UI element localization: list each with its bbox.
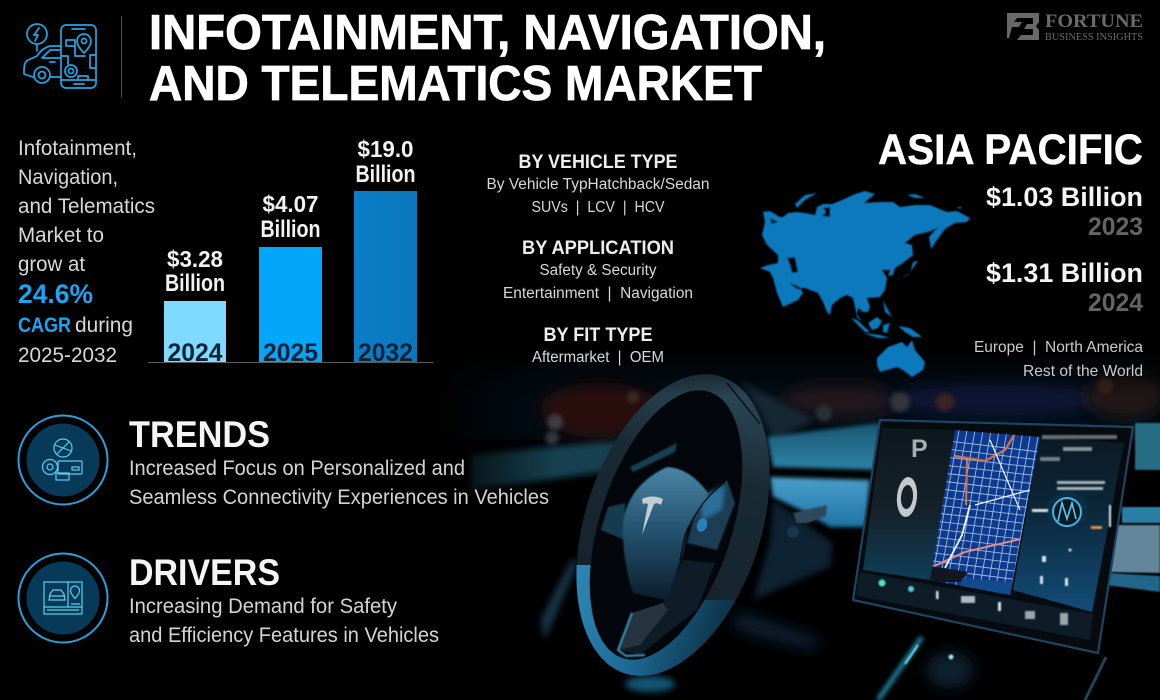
by application: Entertainment | Navigation [503, 285, 693, 302]
wheel: rim [576, 374, 770, 674]
CAGR statement: Navigation, [18, 166, 118, 189]
by vehicle type [486, 152, 710, 216]
bar 2025: 2025 [263, 339, 318, 367]
divider [120, 16, 122, 97]
segmentation list [486, 152, 710, 366]
dashboard bands [470, 380, 1160, 592]
brand tagline: BUSINESS INSIGHTS [1045, 32, 1143, 43]
drivers text: and Efficiency Features in Vehicles [129, 624, 439, 647]
bar 2024: $3.28 [167, 246, 223, 272]
by vehicle type: BY VEHICLE TYPE [518, 152, 678, 173]
bar 2024 [164, 246, 226, 367]
logo and title header [24, 6, 826, 111]
other regions: Rest of the World [1023, 363, 1143, 380]
bar 2032: $19.0 [358, 136, 414, 162]
value 2023 [986, 182, 1143, 241]
trends text: Seamless Connectivity Experiences in Vehicles [129, 486, 549, 509]
steering wheel [576, 374, 770, 676]
icon: brand mark [1007, 13, 1039, 40]
CAGR statement: 2025-2032 [18, 344, 117, 367]
by application [503, 238, 693, 302]
bar 2025 [259, 191, 322, 367]
other regions [974, 339, 1143, 380]
icon: trends [18, 416, 108, 504]
regional stats [878, 126, 1143, 380]
drivers text [129, 595, 439, 647]
bar 2032: Billion [356, 161, 416, 188]
CAGR statement: Infotainment, [18, 137, 137, 160]
brand logo [1007, 11, 1143, 43]
screen: bottom dock [856, 572, 1093, 640]
trends text: Increased Focus on Personalized and [129, 457, 465, 480]
other regions: Europe | North America [974, 339, 1143, 356]
bar 2024: Billion [165, 270, 225, 297]
by application: BY APPLICATION [522, 238, 674, 259]
trends heading: TRENDS [129, 414, 270, 455]
title: AND TELEMATICS MARKET [149, 57, 762, 111]
by application: Safety & Security [540, 262, 657, 279]
wheel: inner dark void [590, 390, 742, 660]
brand name: FORTUNE [1045, 11, 1143, 32]
icon: drivers [18, 554, 108, 642]
value 2023: $1.03 Billion [986, 182, 1143, 212]
map: Asia Pacific [760, 191, 970, 377]
bar chart: market size [148, 136, 433, 367]
by fit type: BY FIT TYPE [544, 325, 652, 346]
by vehicle type: By Vehicle TypHatchback/Sedan [486, 176, 710, 193]
wheel: left spoke [601, 503, 625, 540]
CAGR statement: 24.6% [18, 279, 93, 309]
CAGR statement: CAGR [18, 314, 71, 337]
CAGR statement: grow at [18, 253, 85, 276]
wheel: band seen through the void [630, 443, 677, 472]
value 2024 [986, 258, 1143, 317]
baseline [148, 362, 433, 364]
screen: car silhouette [896, 477, 918, 517]
drivers heading: DRIVERS [129, 552, 280, 593]
by fit type [532, 325, 664, 366]
value 2024: $1.31 Billion [986, 258, 1143, 288]
CAGR statement: and Telematics [18, 195, 155, 218]
bar 2032: 2032 [358, 339, 413, 367]
trends block [18, 414, 549, 509]
region heading: ASIA PACIFIC [878, 126, 1143, 174]
title [149, 6, 826, 111]
wheel: bottom spoke [618, 560, 715, 656]
drivers text: Increasing Demand for Safety [129, 595, 397, 618]
by fit type: Aftermarket | OEM [532, 349, 664, 366]
drivers block [18, 552, 439, 647]
bar 2024: 2024 [168, 339, 223, 367]
screen: P gear: P [911, 435, 928, 463]
CAGR statement: Market to [18, 224, 104, 247]
screen: left panel [863, 428, 955, 580]
trends text [129, 457, 549, 509]
bar 2025: $4.07 [262, 191, 318, 217]
bar 2025: Billion [260, 216, 320, 243]
CAGR statement [18, 137, 155, 367]
screen: right panel [1013, 437, 1124, 612]
by vehicle type: SUVs | LCV | HCV [532, 199, 665, 216]
icon: car with phone navigation [24, 24, 96, 88]
screen: media widget [1046, 491, 1088, 527]
bar 2032 [354, 136, 417, 367]
value 2023: 2023 [1088, 213, 1143, 241]
wheel: right spoke [687, 480, 735, 550]
centre console lines [878, 637, 1106, 700]
icon: Tesla emblem [642, 496, 663, 535]
title: INFOTAINMENT, NAVIGATION, [149, 6, 826, 60]
photo: car interior with steering wheel and touch screen [440, 349, 1160, 700]
wheel: lit lower rim [576, 565, 735, 676]
value 2024: 2024 [1088, 289, 1143, 317]
windshield bokeh haze [478, 366, 1160, 446]
CAGR statement: during [75, 314, 133, 337]
wheel: airbag hub [623, 467, 708, 600]
screen: small labels and icons [878, 435, 1117, 625]
screen: navigation map [930, 430, 1040, 595]
steering column and stalk [540, 500, 833, 692]
touch screen [853, 420, 1133, 653]
